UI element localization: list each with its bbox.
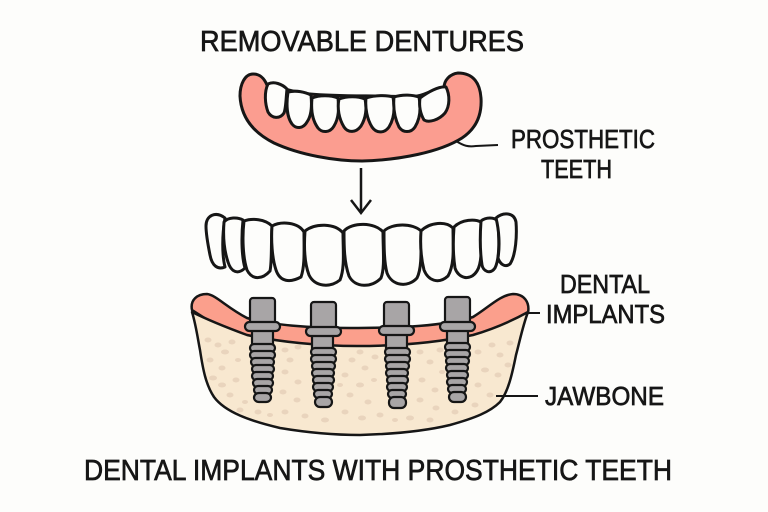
denture gum base [240, 73, 481, 161]
leader line: prosthetic teeth [456, 141, 498, 146]
label: dental implants: DENTAL [560, 269, 650, 299]
bone texture speckles [204, 338, 514, 422]
label: dental implants [546, 269, 665, 329]
caption: dental implants with prosthetic teeth: DENTAL IMPLANTS WITH PROSTHETIC TEETH [84, 455, 672, 487]
implant 4 [440, 297, 475, 402]
implant 3 [379, 302, 414, 408]
label: prosthetic teeth [511, 124, 655, 184]
label: jawbone: JAWBONE [545, 381, 664, 411]
implant 1 [245, 298, 280, 402]
label: prosthetic teeth: PROSTHETIC [511, 124, 655, 154]
denture teeth [265, 83, 449, 132]
removable denture illustration [240, 73, 481, 161]
jawbone [192, 312, 528, 435]
upper prosthetic teeth row [206, 214, 516, 285]
leader line: dental implants [527, 312, 540, 314]
gum tissue [192, 294, 528, 360]
arrow: down [351, 168, 371, 213]
title: removable dentures: REMOVABLE DENTURES [200, 26, 524, 58]
label: dental implants: IMPLANTS [546, 299, 665, 329]
implant 2 [306, 302, 341, 407]
jaw with implants illustration [192, 294, 528, 435]
label: prosthetic teeth: TEETH [541, 154, 612, 184]
leader line: jawbone [496, 395, 538, 397]
